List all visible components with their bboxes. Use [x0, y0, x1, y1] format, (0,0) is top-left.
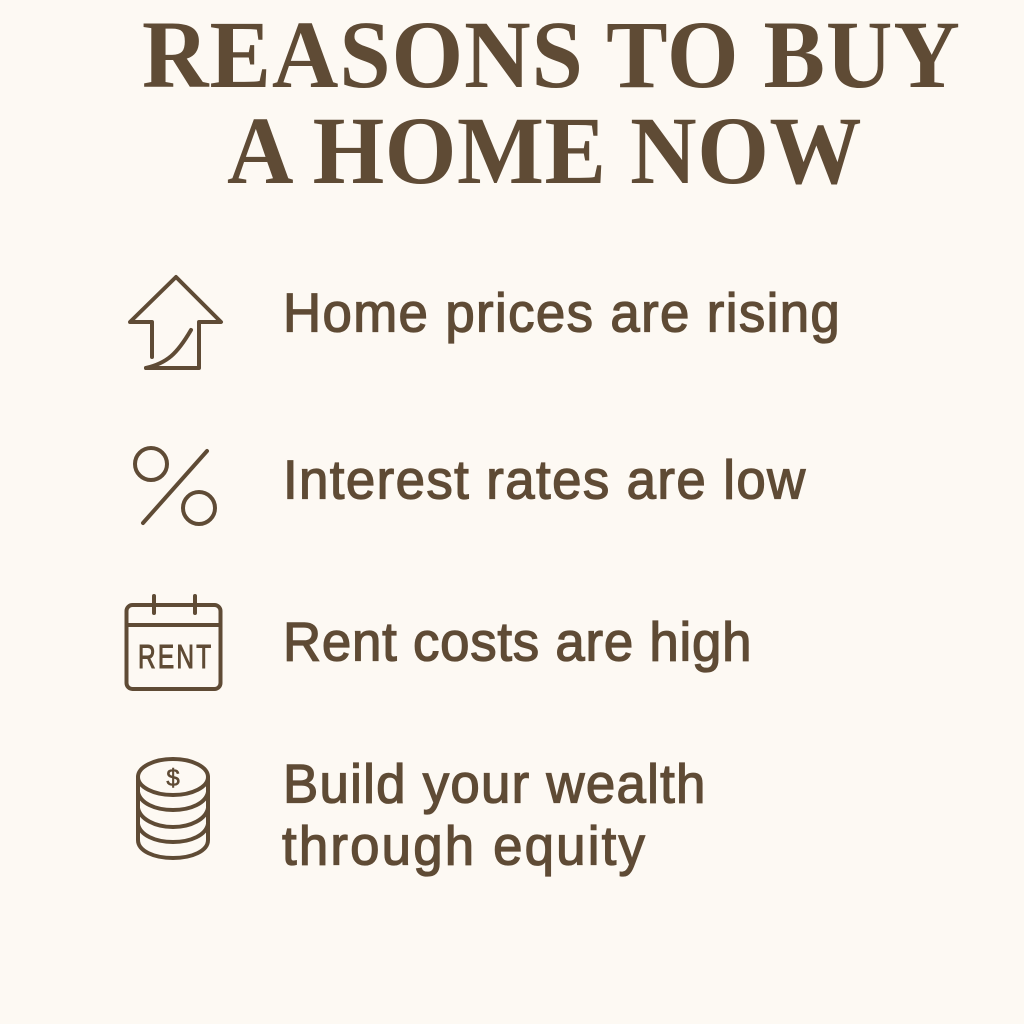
reason 1: home prices	[130, 277, 840, 368]
text: build your wealth through equity	[282, 754, 705, 877]
text: build your wealth through equity: through equity	[282, 816, 645, 877]
text: rent costs are high: Rent costs are high	[283, 612, 751, 673]
title: REASONS TO BUY	[142, 2, 960, 108]
icon: house with rising curve	[130, 277, 221, 368]
icon: rent calendar	[126, 596, 220, 689]
icon: rent calendar: RENT	[138, 640, 213, 676]
icon: coin stack: $	[166, 765, 180, 792]
reason 4: build wealth	[138, 754, 705, 877]
title: A HOME NOW	[227, 98, 862, 204]
text: build your wealth through equity: Build your wealth	[283, 754, 705, 815]
icon: percent sign	[135, 448, 215, 524]
reason 3: rent costs	[126, 596, 751, 689]
reason 2: interest rates	[135, 448, 806, 524]
text: interest rates are low: Interest rates are low	[283, 450, 806, 511]
text: home prices are rising: Home prices are rising	[283, 283, 840, 344]
icon: coin stack	[138, 759, 208, 858]
title	[142, 2, 960, 204]
